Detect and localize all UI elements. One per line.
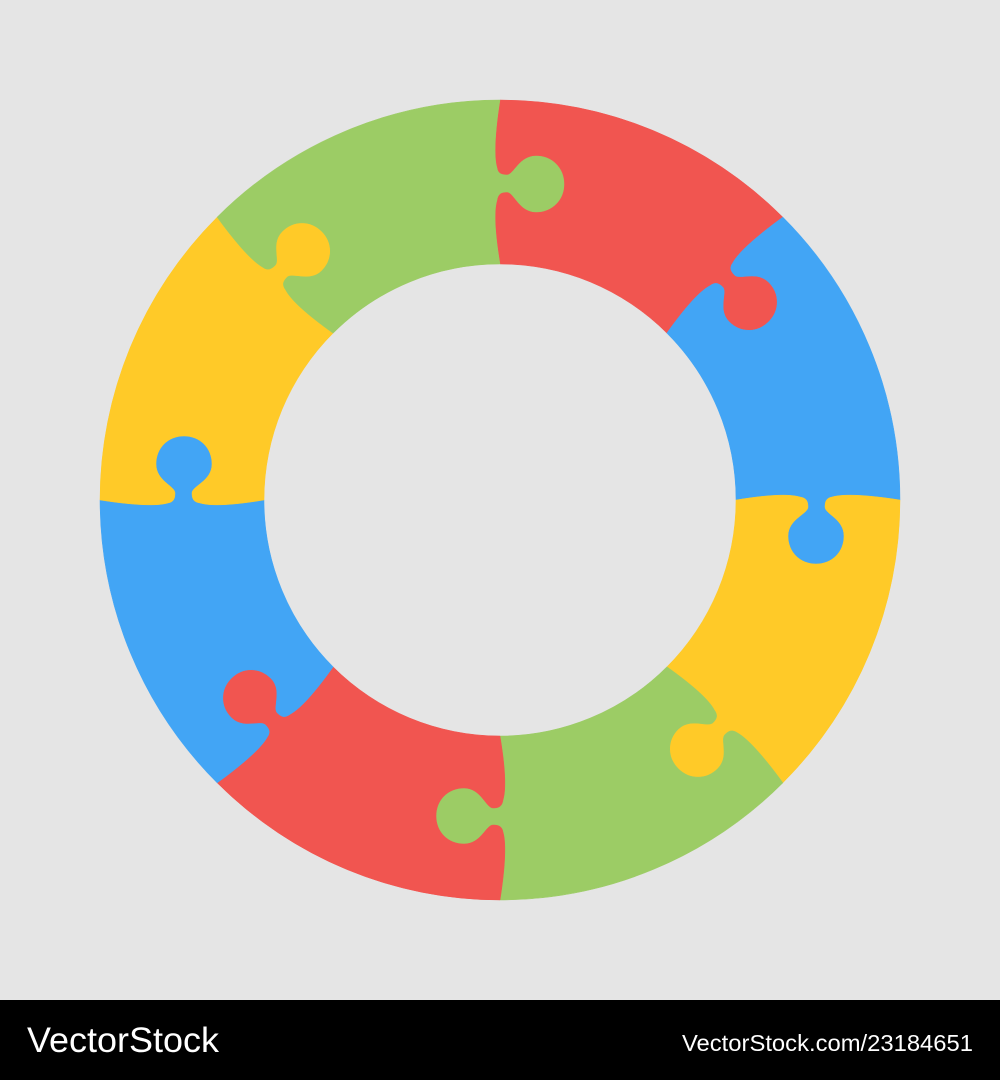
piece: red bottom left [217,667,505,900]
footer image id: VectorStock.com/23184651 [682,1030,973,1056]
piece: blue right [615,214,983,582]
piece: green bottom right [418,615,786,983]
piece: yellow right [667,495,900,783]
footer logo text: VectorStock [27,1021,220,1060]
piece: red top right [495,100,783,333]
piece: yellow left [100,217,333,505]
footer bar [0,1000,1000,1080]
piece: blue left [17,418,385,786]
piece: green top left [214,17,582,385]
